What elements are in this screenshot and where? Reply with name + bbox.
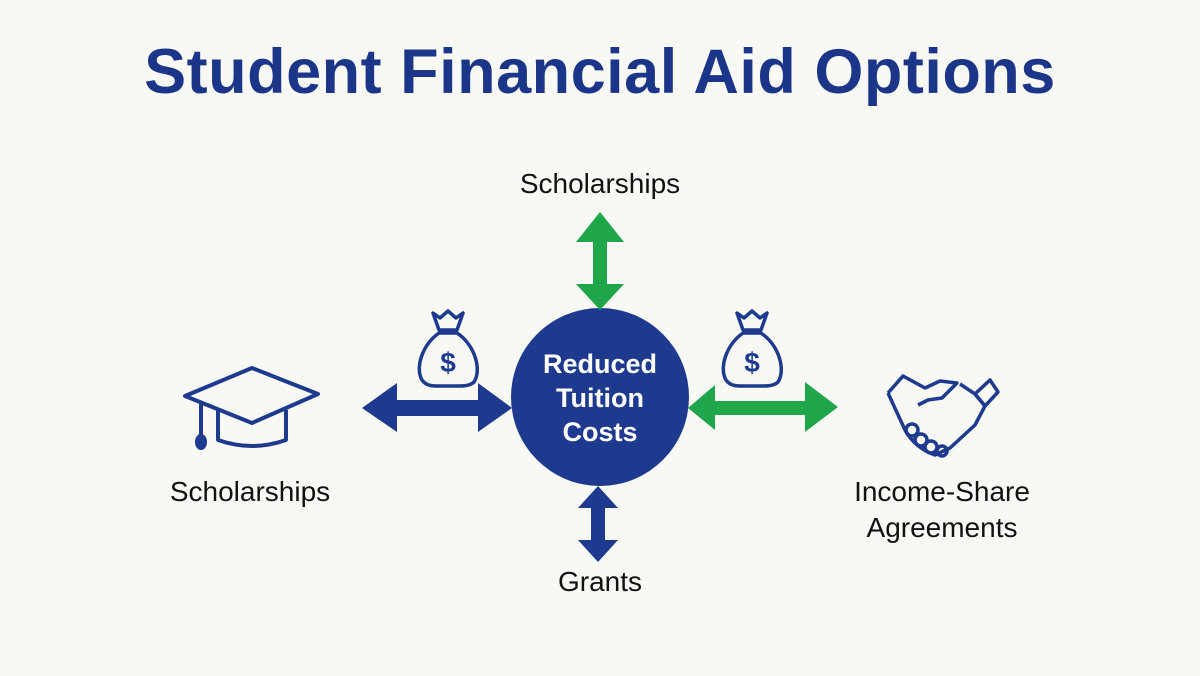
icon: money bag right: $ (744, 347, 760, 378)
icon: money bag left: $ (440, 347, 456, 378)
icon: money bag left (419, 311, 477, 386)
label: income-share agreements (854, 476, 1030, 543)
icon: money bag right (723, 311, 781, 386)
icon: handshake (888, 376, 998, 456)
center circle: Reduced (543, 349, 657, 379)
label: grants: Grants (558, 566, 642, 597)
center circle: Tuition (556, 383, 644, 413)
arrow: bottom blue (578, 486, 618, 562)
icon: graduation cap (185, 368, 318, 448)
label: left scholarships: Scholarships (170, 476, 330, 507)
label: top scholarships: Scholarships (520, 168, 680, 199)
arrow: right green (688, 382, 838, 432)
arrow: top green (576, 212, 624, 310)
center circle (511, 308, 689, 486)
title: Student Financial Aid Options (144, 37, 1056, 107)
arrow: left blue (362, 383, 512, 432)
label: income-share agreements: Income-Share (854, 476, 1030, 507)
center circle: Costs (562, 417, 638, 447)
label: income-share agreements: Agreements (867, 512, 1017, 543)
